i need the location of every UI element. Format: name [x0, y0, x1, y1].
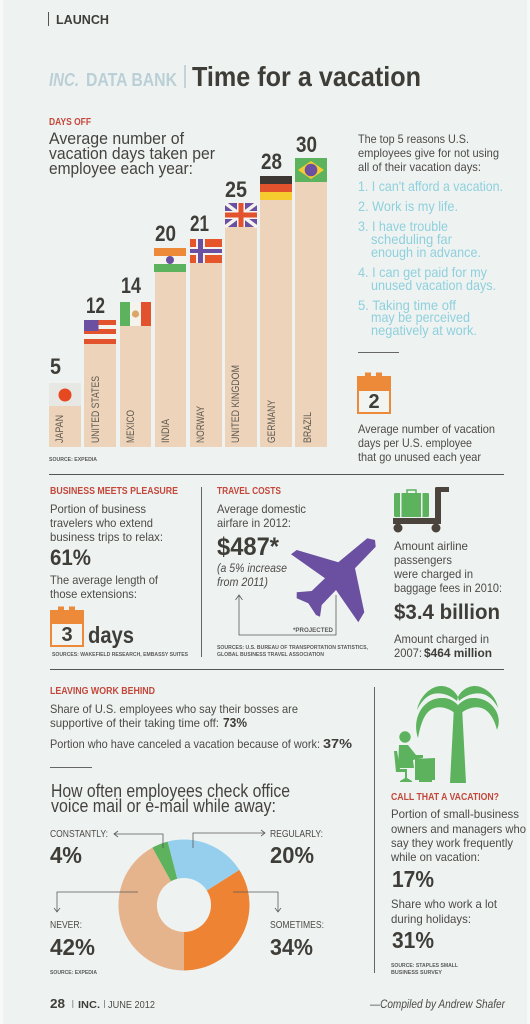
- bar chart: vacation days by country: [49, 132, 327, 447]
- footer: JUNE 2012: [108, 999, 155, 1011]
- text block: Share who work a lot: [391, 897, 498, 911]
- text block: Amount airline: [394, 539, 468, 553]
- unused days text: that go unused each year: [358, 450, 481, 464]
- stats text: supportive of their taking time off:: [50, 716, 219, 730]
- reasons list: 2. Work is my life.: [358, 198, 458, 214]
- reasons list: negatively at work.: [371, 322, 477, 338]
- bar: Brazil: 30: [296, 132, 317, 157]
- icon: palm tree and desk worker: [394, 686, 499, 783]
- panel: leaving work behind: [50, 686, 352, 976]
- source: BUSINESS SURVEY: [391, 970, 442, 976]
- reasons list: may be perceived: [371, 309, 470, 325]
- chart heading: Average number of: [49, 129, 184, 148]
- icon: calendar 3 days: days: [88, 622, 134, 648]
- label: sometimes: 34%: [270, 934, 313, 960]
- heading: days off: DAYS OFF: [49, 117, 91, 128]
- text block: say they work frequently: [391, 836, 513, 850]
- icon: calendar 3 days: 3: [61, 624, 73, 646]
- text block: [50, 573, 159, 601]
- label: never: 42%: [50, 934, 95, 960]
- bar: Mexico: 14: [121, 273, 142, 298]
- bar: Japan: [49, 354, 81, 447]
- title: Time for a vacation: [192, 61, 421, 92]
- label: never: [50, 892, 138, 960]
- source: SOURCE: STAPLES SMALL: [391, 963, 459, 969]
- text block: passengers: [394, 553, 452, 567]
- footer: —Compiled by Andrew Shafer: [369, 997, 506, 1011]
- title: DATA BANK: [86, 70, 177, 90]
- arrow: projected: *PROJECTED: [293, 627, 333, 634]
- bar: India: INDIA: [160, 418, 172, 443]
- bar: Norway: 21: [190, 211, 209, 236]
- reasons list: 4. I can get paid for my: [358, 264, 487, 280]
- label: never: NEVER:: [50, 919, 82, 931]
- bar: United Kingdom: 25: [225, 177, 247, 202]
- bar: United States: 12: [86, 293, 105, 318]
- text block: Portion of business: [50, 502, 146, 516]
- bar: Germany: GERMANY: [266, 399, 278, 443]
- text block: [50, 502, 163, 544]
- heading: TRAVEL COSTS: [217, 486, 281, 497]
- footer: [50, 996, 506, 1011]
- text block: airfare in 2012:: [217, 516, 291, 530]
- label: regularly: 20%: [270, 842, 314, 868]
- icon: calendar 3 days: [50, 606, 134, 648]
- reasons list: 3. I have trouble: [358, 218, 448, 234]
- bar: India: 20: [155, 221, 176, 246]
- stat: 17%: 17%: [392, 866, 434, 892]
- stats text: Share of U.S. employees who say their bosses are: [50, 702, 298, 716]
- text block: [390, 807, 526, 864]
- donut chart: [118, 840, 249, 970]
- text block: [217, 502, 306, 530]
- intro text: The top 5 reasons U.S.: [358, 132, 469, 146]
- stat: $487: $487*: [217, 533, 279, 561]
- bar: Norway: NORWAY: [195, 405, 207, 443]
- reasons list: scheduling far: [371, 231, 452, 247]
- stats text: Portion who have canceled a vacation because of work:: [50, 737, 320, 751]
- icon: calendar 2: 2: [368, 391, 380, 413]
- title: [49, 61, 421, 92]
- heading: LEAVING WORK BEHIND: [50, 686, 155, 697]
- label: constantly: [50, 828, 163, 868]
- source: [391, 963, 459, 976]
- icon: calendar 2: [357, 372, 391, 414]
- bar: Japan: JAPAN: [54, 415, 66, 443]
- intro text: all of their vacation days:: [358, 160, 481, 174]
- bar: India: [154, 221, 186, 447]
- bar: Mexico: [120, 273, 151, 447]
- source: [217, 645, 368, 658]
- footer: INC.: [78, 1000, 100, 1011]
- reasons list: unused vacation days.: [371, 277, 496, 293]
- text block: business trips to relax:: [50, 530, 163, 544]
- panel: call that a vacation: [390, 686, 526, 976]
- bar: Brazil: BRAZIL: [302, 412, 314, 443]
- bar: Germany: [260, 149, 292, 447]
- bar: Mexico: MEXICO: [125, 410, 137, 443]
- text block: those extensions:: [50, 587, 137, 601]
- heading: CALL THAT A VACATION?: [391, 792, 499, 803]
- reasons list: enough in advance.: [371, 244, 481, 260]
- unused days text: days per U.S. employee: [358, 436, 472, 450]
- panel: business meets pleasure: [50, 486, 188, 658]
- stat: 61%: 61%: [50, 545, 91, 570]
- bar: United States: [84, 293, 116, 447]
- stat: $3.4 billion: $3.4 billion: [394, 601, 500, 624]
- chart heading: employee each year:: [49, 159, 193, 178]
- text block with 2007 figure: [394, 632, 492, 660]
- icon: airplane: [291, 538, 376, 622]
- chart heading: How often employees check office: [51, 781, 290, 801]
- bar: United Kingdom: UNITED KINGDOM: [230, 365, 242, 443]
- reasons list: 5. Taking time off: [358, 297, 456, 313]
- chart heading: [51, 781, 290, 816]
- text block with 2007 figure: $464 million: [424, 646, 492, 660]
- source: SOURCES: WAKEFIELD RESEARCH, EMBASSY SUITES: [52, 652, 188, 658]
- footer: 28: [50, 996, 65, 1011]
- text block: baggage fees in 2010:: [394, 581, 502, 595]
- stats text: [50, 702, 352, 751]
- panel: baggage fees: [393, 487, 502, 660]
- reasons list: 1. I can't afford a vacation.: [358, 178, 503, 194]
- stats text: 73%: [223, 716, 247, 730]
- text block with 2007 figure: Amount charged in: [394, 632, 489, 646]
- stats text: 37%: [323, 737, 352, 751]
- label: sometimes: SOMETIMES:: [270, 919, 324, 931]
- label: regularly: REGULARLY:: [270, 828, 323, 840]
- note: increase: from 2011): [217, 575, 268, 589]
- unused days text: Average number of vacation: [358, 422, 495, 436]
- bar: United Kingdom: [225, 177, 257, 447]
- text block with 2007 figure: 2007:: [394, 646, 422, 660]
- text block: Portion of small-business: [391, 807, 519, 821]
- text block: were charged in: [393, 567, 473, 581]
- bar: Brazil: [295, 132, 327, 447]
- stat: 31%: 31%: [392, 927, 434, 953]
- intro text: [358, 132, 499, 174]
- section tag: launch: LAUNCH: [56, 12, 109, 27]
- chart heading: vacation days taken per: [49, 144, 215, 163]
- unused days text: [358, 422, 495, 464]
- label: constantly: 4%: [50, 842, 82, 868]
- text block: The average length of: [50, 573, 159, 587]
- chart heading: voice mail or e-mail while away:: [51, 796, 276, 816]
- label: regularly: [193, 828, 323, 868]
- icon: luggage cart: [393, 487, 449, 532]
- source: SOURCES: U.S. BUREAU OF TRANSPORTATION STATISTICS,: [217, 645, 368, 651]
- bar: Japan: 5: [50, 354, 61, 379]
- heading: BUSINESS MEETS PLEASURE: [50, 486, 178, 497]
- text block: Average domestic: [217, 502, 306, 516]
- text block: travelers who extend: [50, 516, 153, 530]
- bar: Norway: [190, 211, 222, 447]
- panel: days off: [49, 117, 327, 463]
- label: constantly: CONSTANTLY:: [50, 828, 108, 840]
- intro text: employees give for not using: [358, 146, 499, 160]
- reasons list: [358, 178, 503, 338]
- text block: [393, 539, 502, 595]
- source: GLOBAL BUSINESS TRAVEL ASSOCIATION: [217, 652, 324, 658]
- source: days off: SOURCE: EXPEDIA: [49, 457, 97, 463]
- text block: while on vacation:: [390, 850, 480, 864]
- arrow: projected: [236, 595, 336, 635]
- title: INC.: [49, 70, 79, 90]
- label: sometimes: [233, 892, 324, 960]
- text block: [391, 897, 498, 926]
- chart heading: [49, 129, 215, 178]
- note: increase: [217, 561, 287, 589]
- panel: top 5 reasons: [357, 132, 503, 464]
- bar: Germany: 28: [261, 149, 282, 174]
- note: increase: (a 5% increase: [217, 561, 287, 575]
- source: SOURCE: EXPEDIA: [50, 970, 97, 976]
- text block: during holidays:: [391, 912, 471, 926]
- bar: United States: UNITED STATES: [90, 376, 102, 443]
- panel: travel costs: [217, 486, 376, 658]
